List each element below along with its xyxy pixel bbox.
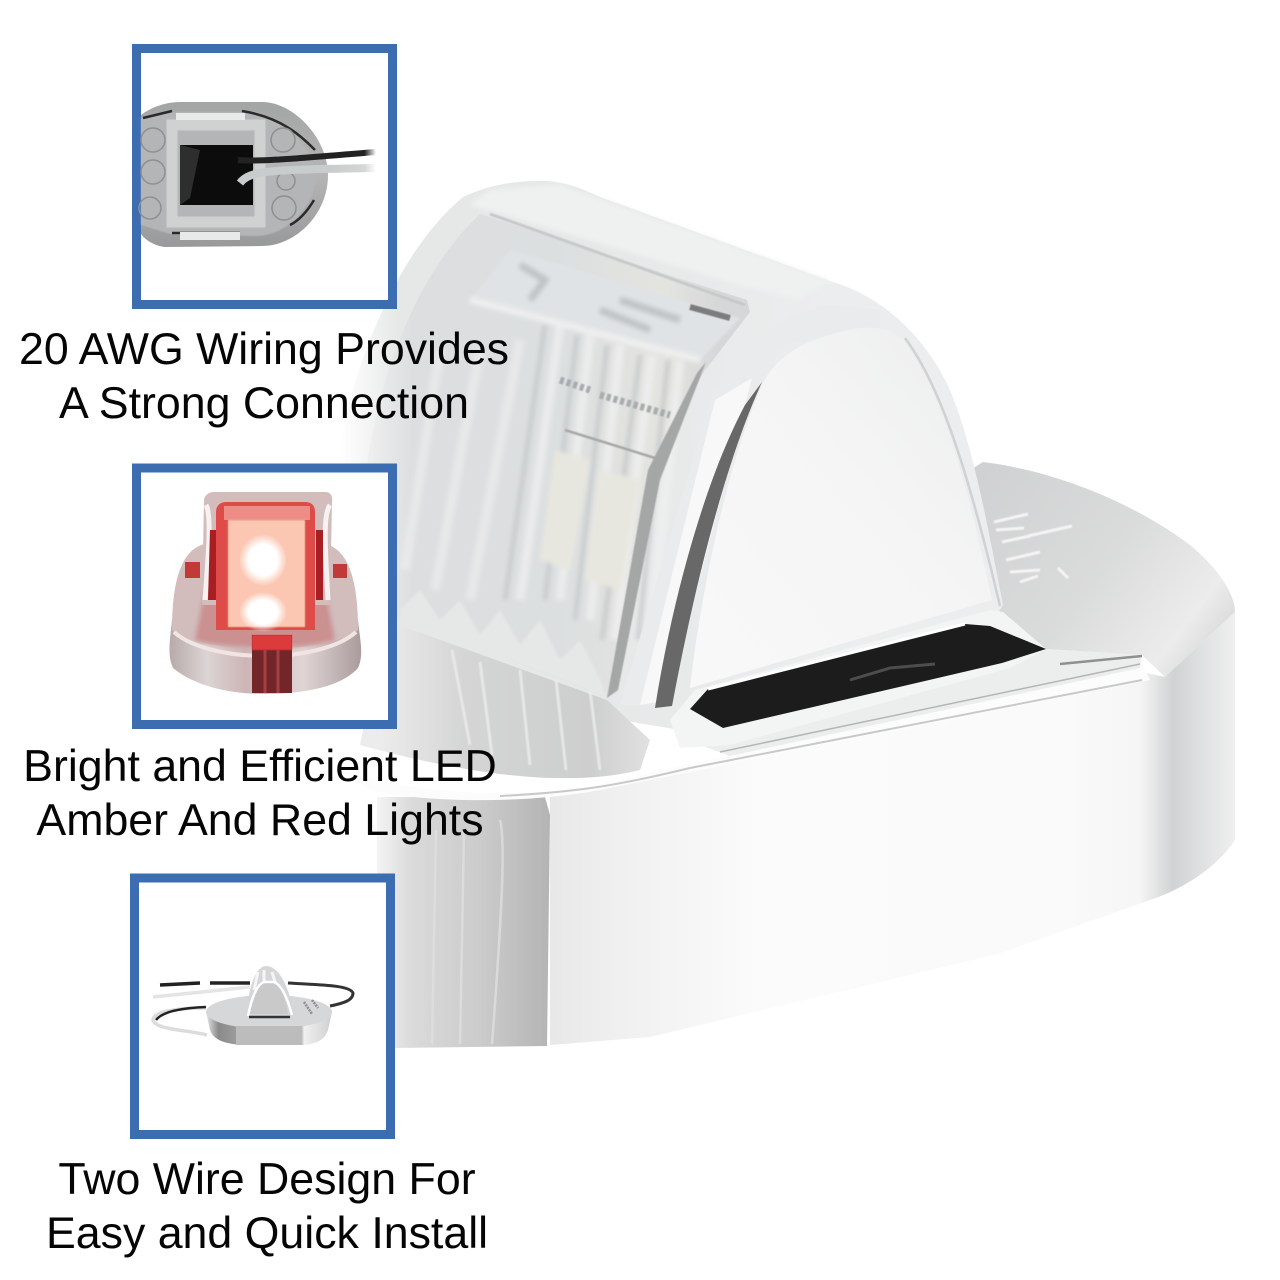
caption: LED: Bright and Efficient LED [23,742,497,791]
base top [172,544,358,649]
frame [134,878,390,1134]
stripe inner lines [265,650,278,693]
slot chrome lip [708,624,965,689]
frame [136,48,392,304]
stripe highlight [252,635,292,650]
embossed base lettering [994,514,1072,582]
caption: two wire: Two Wire Design For [58,1155,476,1204]
slot opening [690,624,1046,728]
panel: wiring inset [136,48,392,304]
lower wires loop [153,1008,207,1035]
base top surface [970,462,1235,677]
LED glow upper [239,534,287,586]
panel: red LED inset [136,468,392,724]
black well [180,145,253,205]
lens circles [139,128,296,220]
shaded band on left of base [377,797,550,1048]
caption: wiring [19,325,509,428]
base front face [550,612,1235,1045]
bracket clear [172,125,260,222]
well shading [180,145,200,205]
hood [202,492,332,605]
slot surround [670,610,1046,748]
black wire [238,152,376,161]
side slots [185,562,347,578]
hood outline [248,982,292,1016]
hood lens stripes [254,970,276,990]
black lower wire [156,1007,206,1020]
clear lens back [141,112,316,236]
frame [136,468,392,724]
lower lens reflection [360,620,650,778]
dark strip at lens edge [607,362,706,698]
icon: lit red LED light [169,492,361,694]
base wall [206,1012,332,1045]
dark gasket edge [143,111,315,233]
slot reflection [850,664,935,680]
caption: LED: Amber And Red Lights [36,796,484,845]
base rim [174,632,356,656]
hood white highlights [205,505,330,600]
main product photo: chrome LED marker light [335,181,1235,1048]
top clip [176,113,245,240]
caption: wiring: 20 AWG Wiring Provides [19,325,509,374]
rib scallops [400,590,607,698]
base lip behind slot [700,649,1142,756]
base top glow [195,590,335,648]
red side shade [208,530,323,600]
rim bright strip [640,378,752,705]
embossed letters [304,1000,318,1014]
lip chrome lines [500,656,1142,796]
caption: two wire [46,1155,488,1258]
base top [206,995,332,1029]
hood face [250,983,288,1014]
rim highlight [340,664,1150,800]
reflection lines on band [432,820,503,1044]
warm lens highlights [540,450,640,590]
caption: two wire: Easy and Quick Install [46,1209,488,1258]
icon: rear of light with wires [139,102,376,247]
lens top band [224,506,310,520]
hood chrome outer shell [335,181,1003,730]
hood [246,966,294,1020]
panel: two wire inset [134,878,390,1134]
caption: wiring: A Strong Connection [59,379,469,428]
icon: complete light with wires [153,966,353,1045]
face right edge [905,338,1000,606]
red centre stripe [252,635,292,693]
chrome front rim [620,305,880,706]
hood side face [690,328,992,688]
hood dark reflection band [655,382,762,708]
red lens [216,502,315,630]
base wall [169,620,361,694]
lower lens ribs [452,650,600,770]
lens sharp marks [490,214,745,458]
lens optics detail [405,265,700,640]
white wire [240,168,376,183]
white wire left [153,987,250,997]
caption: LED [23,742,497,845]
black wire right [288,983,353,1006]
black wire left [160,983,250,985]
top lens step [470,250,740,360]
slot and plate panel [236,1026,302,1045]
LED glow lower [239,592,287,632]
pale lens [228,520,305,627]
chrome shell [141,102,328,247]
slot [249,1016,290,1018]
lens [365,214,750,698]
hood highlight strip [470,184,830,300]
